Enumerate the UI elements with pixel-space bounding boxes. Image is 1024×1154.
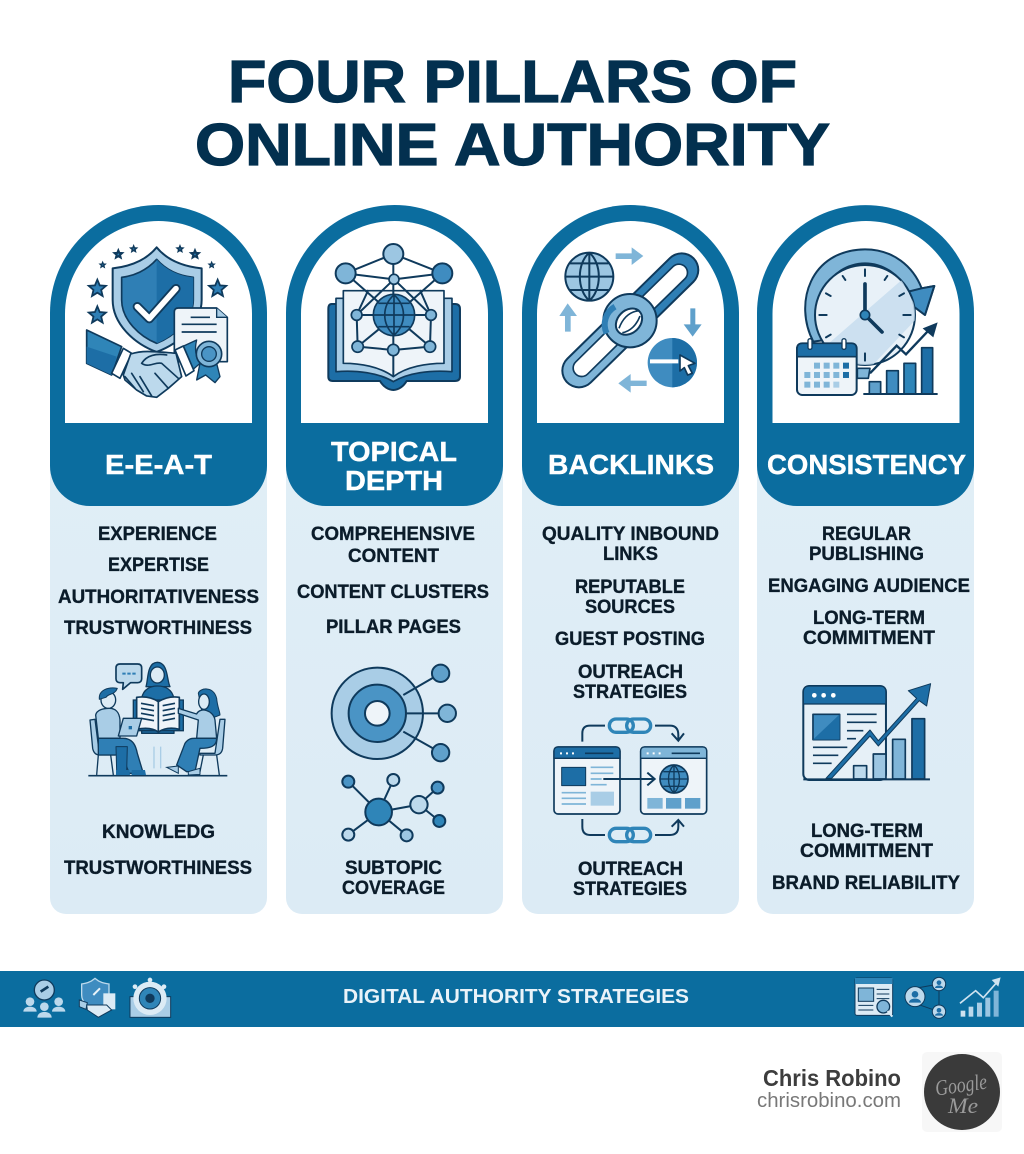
text block: Consistency items: COMMITMENT (803, 628, 935, 649)
text block: E-E-A-T items: EXPERTISE (108, 555, 209, 576)
heading: E-E-A-T: E-E-A-T (105, 449, 212, 480)
icon: shield and handshake (79, 978, 115, 1017)
icon: clock, calendar and growth chart (797, 249, 938, 395)
text block: Topical Depth items: CONTENT CLUSTERS (297, 582, 489, 603)
text block: Consistency items: PUBLISHING (809, 544, 924, 565)
text block: Backlinks items: GUEST POSTING (555, 629, 705, 650)
text block: E-E-A-T items: AUTHORITATIVENESS (58, 587, 259, 608)
text block: E-E-A-T items: TRUSTWORTHINESS (64, 618, 252, 639)
footer banner (0, 971, 1024, 1027)
icon: web page with magnifier (855, 978, 893, 1017)
text block: Topical Depth items: PILLAR PAGES (326, 617, 461, 638)
text block: Topical Depth items (297, 524, 489, 638)
icon: hub and spoke network (342, 774, 445, 841)
icon: connected people (905, 977, 946, 1018)
title: FOUR PILLARS OF (228, 49, 797, 115)
text block: E-E-A-T lower items: TRUSTWORTHINESS (64, 858, 252, 879)
icon: book and globe target (130, 978, 171, 1017)
text block: Consistency items: ENGAGING AUDIENCE (768, 576, 970, 597)
text block: Backlinks items: SOURCES (585, 597, 675, 618)
icon: linked browser windows (554, 719, 707, 842)
text block: Subtopic Coverage: SUBTOPIC (345, 858, 442, 879)
heading: Backlinks: BACKLINKS (548, 449, 714, 480)
author credit (757, 1065, 901, 1112)
text block: E-E-A-T items (58, 524, 259, 639)
author credit: Chris Robino (763, 1065, 901, 1091)
text block: Backlinks items: REPUTABLE (575, 577, 685, 598)
text block: Outreach Strategies (573, 859, 687, 900)
title: ONLINE AUTHORITY (195, 112, 830, 178)
text block: Consistency items: REGULAR (822, 524, 911, 545)
text block: Consistency lower items: BRAND RELIABILITY (772, 873, 960, 894)
text block: Backlinks items: OUTREACH (578, 662, 683, 683)
text block: E-E-A-T lower items (64, 822, 252, 879)
text block: Backlinks items: LINKS (603, 544, 658, 565)
icon: small growth chart (960, 977, 1001, 1017)
banner heading: DIGITAL AUTHORITY STRATEGIES (343, 986, 689, 1008)
text block: E-E-A-T lower items: KNOWLEDG (102, 822, 215, 843)
text block: Topical Depth items: CONTENT (348, 546, 439, 567)
text block: Backlinks items (542, 524, 719, 703)
title (195, 49, 830, 178)
text block: Consistency lower items: COMMITMENT (800, 841, 933, 862)
icon: chain link with globe and arrows (559, 247, 702, 393)
text block: Consistency items (768, 524, 970, 649)
panel: E-E-A-T (50, 205, 267, 914)
text block: Subtopic Coverage (342, 858, 445, 899)
logo: Google Me badge: Me (947, 1093, 978, 1118)
panel: Topical Depth (286, 205, 503, 914)
text block: E-E-A-T items: EXPERIENCE (98, 524, 217, 545)
text block: Outreach Strategies: STRATEGIES (573, 879, 687, 900)
heading: Topical Depth: TOPICAL (331, 436, 457, 467)
panel: Backlinks (522, 205, 739, 914)
text block: Consistency items: LONG-TERM (813, 608, 925, 629)
icon: open book with globe network (328, 244, 460, 390)
icon: team target (23, 980, 65, 1018)
author credit: chrisrobino.com (757, 1090, 901, 1112)
text block: Subtopic Coverage: COVERAGE (342, 878, 445, 899)
icon: shield, handshake and certificate (87, 246, 227, 397)
text block: Backlinks items: QUALITY INBOUND (542, 524, 719, 545)
text block: Backlinks items: STRATEGIES (573, 682, 687, 703)
heading: Topical Depth (331, 436, 457, 496)
panel: Consistency (757, 205, 974, 914)
logo: Google Me badge (922, 1052, 1002, 1132)
icon: web page with rising chart (803, 684, 931, 780)
heading: Topical Depth: DEPTH (345, 465, 443, 496)
text block: Outreach Strategies: OUTREACH (578, 859, 683, 880)
text block: Consistency lower items (772, 821, 960, 894)
text block: Topical Depth items: COMPREHENSIVE (311, 524, 475, 545)
logo: Google Me badge: Google (933, 1069, 989, 1101)
icon: people studying together (88, 662, 227, 776)
heading: Consistency: CONSISTENCY (767, 449, 966, 480)
icon: target with connected nodes (332, 665, 456, 761)
text block: Consistency lower items: LONG-TERM (811, 821, 923, 842)
